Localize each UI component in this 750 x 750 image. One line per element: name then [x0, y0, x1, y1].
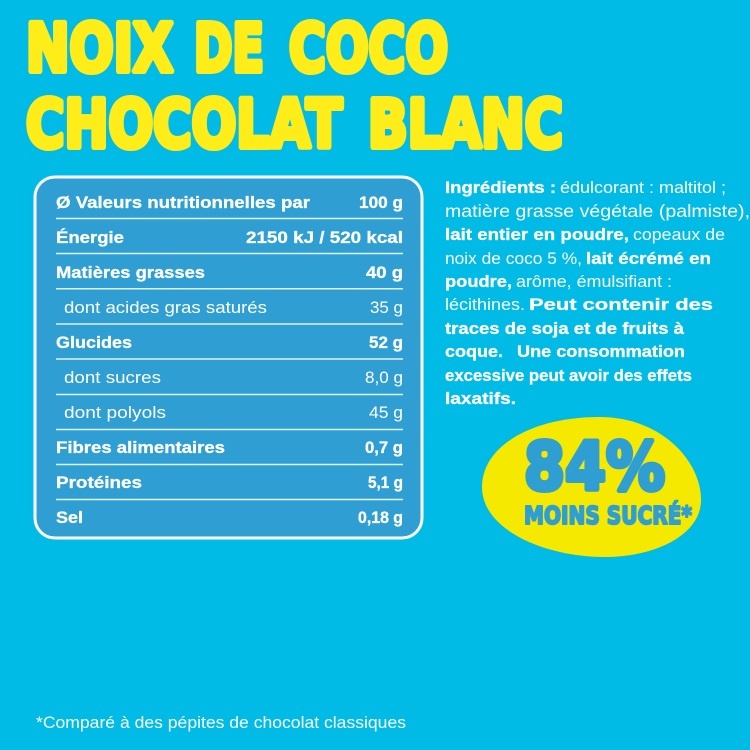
row: fibre	[56, 439, 403, 457]
text block: ingredients	[445, 179, 750, 408]
row: carbohydrates: 52 g	[369, 334, 403, 352]
row: sugars: 8,0 g	[365, 369, 403, 387]
row: sugars: dont sucres	[64, 369, 161, 387]
title: NOIX	[26, 10, 173, 87]
row: protein: 5,1 g	[368, 474, 403, 492]
row: energy	[56, 228, 403, 247]
row: salt: Sel	[56, 509, 83, 527]
text block: ingredients: coque.	[445, 343, 503, 361]
text block: ingredients: lait entier en poudre,	[445, 226, 629, 244]
row: carbohydrates	[56, 334, 403, 352]
row: header	[56, 194, 403, 212]
text block: ingredients: copeaux de	[633, 226, 725, 244]
row: polyols	[64, 404, 403, 422]
row: protein: Protéines	[56, 474, 142, 492]
text block: ingredients: poudre,	[445, 273, 512, 291]
title: CHOCOLAT	[26, 86, 342, 163]
row: fats	[56, 264, 403, 282]
title	[26, 10, 563, 163]
text block: ingredients: Peut contenir des	[529, 295, 713, 314]
row: fats: Matières grasses	[56, 264, 205, 282]
badge caption: MOINS SUCRÉ*	[524, 501, 692, 530]
row: saturated: 35 g	[370, 299, 403, 317]
row: salt: 0,18 g	[358, 509, 403, 527]
badge percentage: 84%	[524, 428, 665, 506]
text block: ingredients: lait écrémé en	[586, 250, 711, 268]
row: saturated: dont acides gras saturés	[64, 299, 267, 317]
row: fibre: 0,7 g	[365, 439, 403, 457]
title: BLANC	[368, 86, 563, 163]
text block: ingredients: excessive peut avoir des effets	[445, 367, 692, 385]
row: carbohydrates: Glucides	[56, 334, 132, 352]
row: fibre: Fibres alimentaires	[56, 439, 225, 457]
text block: ingredients: noix de coco 5 %,	[445, 250, 582, 268]
row: header: Ø Valeurs nutritionnelles par	[56, 194, 311, 212]
badge: 84% moins sucré	[482, 417, 701, 557]
text block: ingredients: Ingrédients :	[445, 179, 556, 197]
badge blob	[482, 417, 701, 557]
panel: nutrition table	[35, 177, 422, 538]
footnote: *Comparé à des pépites de chocolat classiques	[36, 714, 406, 732]
text block: ingredients: édulcorant : maltitol ;	[560, 179, 726, 197]
text block: ingredients: Une consommation	[517, 343, 685, 361]
text block: ingredients: matière grasse végétale (palmiste),	[445, 201, 750, 221]
text block: ingredients: laxatifs.	[445, 390, 516, 408]
text block: ingredients: traces de soja et de fruits à	[445, 320, 685, 338]
row: protein	[56, 474, 403, 492]
row: polyols: dont polyols	[64, 404, 166, 422]
row: saturated	[64, 299, 403, 317]
row: salt	[56, 509, 403, 527]
row: energy: Énergie	[56, 228, 124, 247]
title: COCO	[289, 10, 448, 87]
row: polyols: 45 g	[369, 404, 403, 422]
row: fats: 40 g	[366, 264, 403, 282]
title: DE	[194, 10, 264, 87]
row: header: 100 g	[359, 194, 403, 212]
row: sugars	[64, 369, 403, 387]
text block: ingredients: lécithines.	[445, 296, 525, 314]
row: energy: 2150 kJ / 520 kcal	[246, 229, 403, 247]
text block: ingredients: arôme, émulsifiant :	[516, 273, 672, 291]
